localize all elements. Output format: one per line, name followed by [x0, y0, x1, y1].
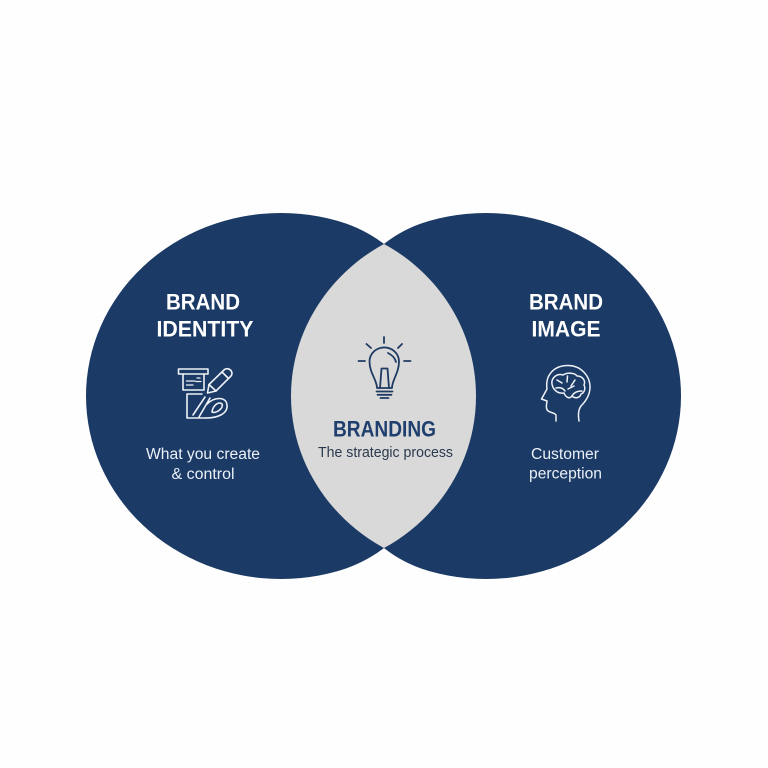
circle: brand image	[291, 213, 681, 579]
top notch	[340, 221, 427, 244]
heading: branding: BRANDING	[333, 416, 436, 442]
text: customer: Customer	[531, 446, 599, 463]
icon: head with brain	[542, 366, 590, 421]
heading: brand identity: BRAND	[166, 290, 240, 314]
text: the strategic process: The strategic process	[318, 445, 453, 461]
text: perception: perception	[529, 466, 602, 482]
icon: light bulb	[358, 337, 410, 398]
circle: brand identity	[86, 213, 476, 579]
text: what you create: What you create	[146, 446, 260, 463]
heading: identity line: IDENTITY	[156, 316, 254, 342]
icon: design tools	[178, 369, 232, 418]
bottom notch	[340, 548, 427, 571]
heading: brand image: BRAND	[529, 290, 603, 314]
heading: image line: IMAGE	[532, 316, 600, 342]
text: and control: & control	[172, 466, 234, 483]
overlap: branding	[291, 244, 476, 548]
